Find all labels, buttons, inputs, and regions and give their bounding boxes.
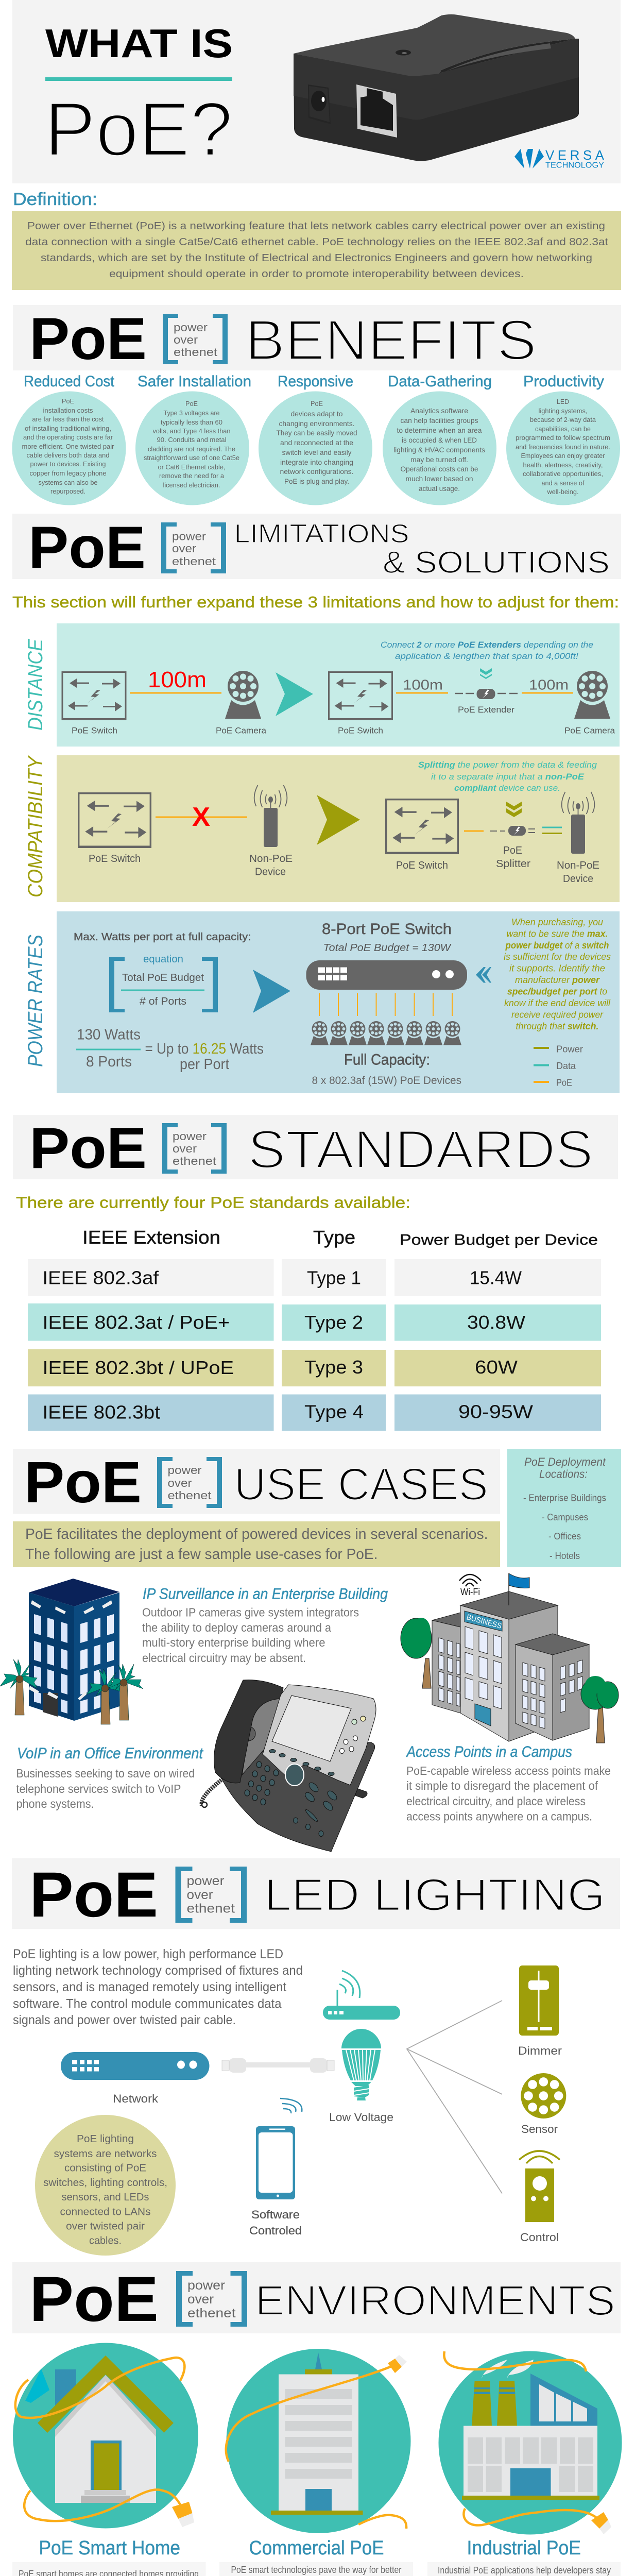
panel: standards heading: PoE bbox=[29, 1116, 147, 1180]
environment: industrial illustration bbox=[439, 2351, 622, 2535]
subheading: three limitations: This section will further expand these 3 limitations and how to adjust for them: bbox=[12, 593, 619, 611]
table row: type 2: 30.8W bbox=[467, 1312, 525, 1333]
equation block: Total PoE Budget bbox=[122, 972, 204, 984]
use case: IP surveillance: multi-story enterprise building where bbox=[142, 1636, 325, 1649]
table row: type 1: Type 1 bbox=[307, 1267, 361, 1288]
compatibility problem diagram: PoE Switch bbox=[89, 853, 141, 865]
benefit: productivity: lighting systems, bbox=[539, 407, 587, 415]
table row: type 4 bbox=[28, 1394, 601, 1431]
table row: type 2: Type 2 bbox=[304, 1312, 363, 1333]
8-port switch diagram: 8-Port PoE Switch bbox=[322, 921, 452, 938]
equation block bbox=[74, 931, 264, 1073]
benefit: responsive: and reconnected at the bbox=[280, 438, 353, 447]
panel: use cases heading: ethenet bbox=[168, 1489, 211, 1502]
panel: definition: equipment should operate in order to promote interoperability between devices. bbox=[109, 268, 524, 280]
panel: standards heading bbox=[13, 1115, 618, 1180]
control: remote: Control bbox=[520, 2231, 559, 2244]
compatibility solution diagram: Device bbox=[563, 873, 593, 885]
panel: use cases heading bbox=[13, 1449, 500, 1515]
power rates note: manufacturer power bbox=[515, 975, 600, 985]
benefit: data-gathering: Analytics software bbox=[410, 406, 468, 415]
distance problem diagram: PoE Camera bbox=[216, 725, 267, 736]
callout: PoE lighting systems: systems are networks bbox=[54, 2148, 157, 2160]
distance problem diagram: 100m bbox=[148, 667, 207, 692]
benefit: responsive: PoE is plug and play. bbox=[284, 477, 349, 485]
icon: palm trees bbox=[0, 1659, 143, 1724]
panel: benefits heading: PoE bbox=[29, 306, 147, 372]
panel: deployment locations bbox=[507, 1449, 621, 1567]
legend: Data bbox=[556, 1061, 576, 1071]
callout: PoE lighting systems: cables. bbox=[89, 2235, 122, 2246]
benefit: responsive: They can be easily moved bbox=[276, 429, 357, 437]
benefit: responsive: devices adapt to bbox=[290, 410, 343, 418]
benefit: data-gathering: may be turned off. bbox=[410, 455, 468, 464]
environment: commercial illustration bbox=[226, 2349, 411, 2533]
compatibility note: Splitting the power from the data & feeding bbox=[418, 760, 597, 770]
benefit: data-gathering: much lower based on bbox=[406, 474, 473, 483]
panel: power rates bbox=[57, 911, 620, 1093]
benefit: productivity: LED bbox=[557, 398, 569, 405]
compatibility note bbox=[418, 760, 597, 793]
panel: deployment locations: - Offices bbox=[548, 1531, 581, 1541]
panel: definition bbox=[12, 211, 621, 290]
benefit: productivity: Productivity bbox=[523, 373, 604, 390]
benefit: productivity: and frequencies found in nature. bbox=[516, 443, 610, 451]
heading: industrial: Industrial PoE bbox=[467, 2537, 581, 2559]
benefit: data-gathering: Operational costs can be bbox=[401, 465, 478, 473]
table header: IEEE Extension bbox=[82, 1227, 220, 1248]
benefit: safer installation: straightforward use of one Cat5e bbox=[144, 454, 239, 462]
benefit: reduced cost bbox=[12, 373, 126, 505]
icon: wireless router bbox=[323, 1971, 400, 2020]
panel: deployment locations: - Enterprise Buildings bbox=[523, 1493, 606, 1503]
benefit: productivity bbox=[506, 373, 620, 505]
benefit: responsive: PoE bbox=[311, 399, 323, 408]
callout: PoE lighting systems: consisting of PoE bbox=[64, 2163, 146, 2174]
use case: VoIP bbox=[16, 1745, 204, 1810]
panel: environments heading: power bbox=[187, 2278, 225, 2293]
benefit: productivity: Employees can enjoy greater bbox=[521, 452, 605, 460]
panel: standards heading: over bbox=[173, 1142, 197, 1155]
icon: smartphone software control: Software bbox=[251, 2208, 300, 2221]
heading: commercial: Commercial PoE bbox=[249, 2537, 384, 2559]
panel: benefits heading: ethenet bbox=[174, 346, 217, 359]
panel: distance bbox=[57, 623, 620, 747]
benefit: reduced cost: power to devices. Existing bbox=[30, 460, 106, 468]
benefit: responsive: changing environments. bbox=[279, 419, 354, 428]
panel: use cases heading: over bbox=[168, 1477, 192, 1489]
benefit: safer installation: typically less than 60 bbox=[161, 418, 222, 426]
callout: PoE lighting systems bbox=[35, 2115, 176, 2256]
icon: wifi signal bbox=[459, 1574, 481, 1597]
table row: type 1 bbox=[28, 1259, 601, 1296]
panel: deployment locations: Locations: bbox=[539, 1467, 588, 1481]
benefit: productivity: because of 2-way data bbox=[530, 416, 596, 423]
icon: PoE lighting bulb bbox=[329, 2029, 393, 2124]
panel: commercial text: PoE smart technologies pave the way for better bbox=[231, 2565, 402, 2575]
panel: industrial text: Industrial PoE applications help developers stay bbox=[438, 2565, 611, 2575]
callout: PoE lighting systems: sensors, and LEDs bbox=[62, 2192, 149, 2203]
table row: type 3 bbox=[28, 1349, 601, 1386]
panel: use cases intro: PoE facilitates the deployment of powered devices in several scenarios. bbox=[25, 1526, 488, 1543]
use case: VoIP: VoIP in an Office Environment bbox=[17, 1745, 204, 1762]
equation block: equation bbox=[143, 954, 183, 965]
panel: use cases heading: power bbox=[168, 1464, 202, 1477]
benefit: safer installation: remove the need for a bbox=[159, 472, 225, 480]
benefit: safer installation: PoE bbox=[185, 400, 198, 408]
use case: access points: PoE-capable wireless access points make bbox=[406, 1764, 611, 1777]
heading: definition: Definition: bbox=[13, 190, 97, 209]
distance solution diagram: PoE Extender bbox=[458, 705, 514, 715]
panel: deployment locations: - Campuses bbox=[542, 1512, 588, 1522]
text: LED lighting description bbox=[13, 1947, 303, 2027]
use case: access points: electrical circuitry, and place wireless bbox=[406, 1794, 586, 1808]
compatibility note: it to a separate input that a non-PoE bbox=[431, 772, 585, 782]
benefit: data-gathering: Data-Gathering bbox=[388, 373, 492, 390]
text: LED lighting description: software. The control module communicates data bbox=[13, 1997, 282, 2011]
icon: campus building: BUSINESS bbox=[466, 1613, 503, 1631]
use case: VoIP: Businesses seeking to save on wired bbox=[16, 1767, 195, 1780]
panel: benefits heading: over bbox=[174, 333, 198, 346]
label: distance: DISTANCE bbox=[24, 638, 47, 731]
title: PoE?: PoE? bbox=[44, 86, 233, 172]
equation block: per Port bbox=[180, 1056, 229, 1073]
benefit: productivity: health, alertness, creativity, bbox=[523, 461, 603, 469]
control: sensor: Sensor bbox=[521, 2123, 558, 2136]
icon: enterprise building bbox=[0, 1579, 143, 1724]
power rates note: through that switch. bbox=[516, 1021, 598, 1031]
logo: versa technology: TECHNOLOGY bbox=[545, 161, 604, 170]
panel: definition: Power over Ethernet (PoE) is a networking feature that lets network cables carry electrical power over an existing bbox=[27, 221, 605, 232]
power rates note bbox=[504, 917, 611, 1031]
connector lines bbox=[407, 2001, 502, 2194]
panel: benefits heading bbox=[13, 305, 621, 372]
distance solution diagram: 100m bbox=[529, 677, 569, 692]
panel: limitations heading: PoE bbox=[28, 515, 146, 581]
icon: PoE lighting bulb: Low Voltage bbox=[329, 2111, 393, 2124]
callout: PoE lighting systems: PoE lighting bbox=[77, 2133, 134, 2145]
distance note bbox=[381, 640, 593, 661]
text: LED lighting description: lighting network technology comprised of fixtures and bbox=[13, 1963, 303, 1978]
panel: use cases heading: PoE bbox=[24, 1450, 142, 1515]
table row: type 2 bbox=[28, 1303, 601, 1341]
use case: VoIP: telephone services switch to VoIP bbox=[16, 1782, 181, 1795]
icon: wifi signal: Wi-Fi bbox=[460, 1587, 480, 1597]
logo: versa technology: VERSA bbox=[545, 147, 605, 163]
distance solution diagram bbox=[328, 668, 615, 736]
compatibility problem diagram: Device bbox=[255, 867, 286, 878]
compatibility solution diagram: PoE bbox=[503, 845, 522, 856]
panel: benefits heading: BENEFITS bbox=[245, 309, 537, 372]
equation block: # of Ports bbox=[140, 996, 186, 1007]
panel: use cases intro bbox=[13, 1521, 500, 1567]
8-port switch diagram: Full Capacity: bbox=[344, 1051, 430, 1069]
benefit: safer installation: cladding are not required. The bbox=[148, 445, 235, 453]
icon: trees bbox=[401, 1618, 619, 1743]
table row: type 2: IEEE 802.3at / PoE+ bbox=[42, 1312, 230, 1333]
panel: smart home text bbox=[12, 2562, 206, 2576]
icon: desk phone bbox=[202, 1680, 376, 1852]
control: sensor bbox=[521, 2073, 566, 2136]
label: power rates: POWER RATES bbox=[24, 935, 47, 1067]
panel: LED lighting heading: over bbox=[186, 1888, 213, 1902]
benefit: productivity: programmed to follow spectrum bbox=[516, 434, 610, 442]
equation block: 8 Ports bbox=[86, 1054, 132, 1070]
use case: IP surveillance: IP Surveillance in an Enterprise Building bbox=[143, 1586, 388, 1602]
table header: Power Budget per Device bbox=[400, 1232, 598, 1248]
benefit: reduced cost: and the operating costs are far bbox=[23, 433, 113, 441]
benefit: safer installation: Type 3 voltages are bbox=[164, 409, 219, 417]
benefit: reduced cost: are far less than the cost bbox=[32, 415, 104, 423]
power rates note: want to be sure the max. bbox=[507, 928, 608, 939]
compatibility note: compliant device can use. bbox=[454, 783, 560, 793]
panel: commercial text bbox=[219, 2562, 413, 2576]
heading: smart home: PoE Smart Home bbox=[39, 2537, 180, 2559]
equation block: Max. Watts per port at full capacity: bbox=[74, 931, 251, 943]
use case: IP surveillance: Outdoor IP cameras give system integrators bbox=[142, 1605, 359, 1619]
panel: limitations heading: over bbox=[172, 542, 196, 555]
8-port switch diagram: Total PoE Budget = 130W bbox=[323, 942, 452, 954]
benefit: reduced cost: Reduced Cost bbox=[24, 373, 115, 390]
panel: limitations heading: ethenet bbox=[172, 555, 216, 568]
distance problem diagram: PoE Switch bbox=[72, 725, 117, 736]
distance problem diagram bbox=[62, 667, 267, 736]
legend: PoE bbox=[556, 1078, 572, 1088]
network switch bbox=[61, 2052, 209, 2105]
benefit: reduced cost: installation costs bbox=[43, 406, 93, 414]
table header: Type bbox=[313, 1227, 355, 1248]
icon: campus building bbox=[401, 1573, 619, 1743]
ethernet cable bbox=[222, 2058, 334, 2073]
panel: LED lighting heading: PoE bbox=[29, 1859, 158, 1930]
table row: type 3: IEEE 802.3bt / UPoE bbox=[42, 1357, 234, 1378]
text: LED lighting description: signals and power over twisted pair cable. bbox=[13, 2013, 236, 2027]
benefit: data-gathering: is occupied & when LED bbox=[402, 436, 477, 444]
table row: type 3: Type 3 bbox=[304, 1357, 363, 1378]
distance note: Connect 2 or more PoE Extenders depending on the bbox=[381, 640, 593, 650]
panel: hero bbox=[12, 0, 621, 183]
use case: access points: it simple to disregard the placement of bbox=[406, 1779, 598, 1792]
panel: environments heading: over bbox=[187, 2292, 214, 2307]
panel: benefits heading: power bbox=[174, 321, 208, 334]
power rates note: receive required power bbox=[511, 1010, 604, 1020]
panel: standards heading: ethenet bbox=[173, 1155, 216, 1167]
panel: limitations heading: & SOLUTIONS bbox=[383, 545, 610, 580]
use case: access points bbox=[406, 1743, 611, 1823]
distance solution diagram: PoE Camera bbox=[564, 725, 615, 736]
panel: LED lighting heading bbox=[12, 1858, 620, 1930]
subheading: four standards: There are currently four PoE standards available: bbox=[16, 1193, 410, 1212]
power rates note: know if the end device will bbox=[504, 998, 611, 1008]
panel: environments heading bbox=[12, 2262, 621, 2335]
power rates note: power budget of a switch bbox=[505, 940, 609, 951]
table row: type 1: 15.4W bbox=[470, 1267, 522, 1288]
icon: PoE injector device bbox=[294, 14, 579, 161]
label: compatibility: COMPATIBILITY bbox=[24, 755, 47, 897]
distance note: application & lengthen that span to 4,000ft! bbox=[395, 651, 578, 661]
panel: LED lighting heading: power bbox=[186, 1874, 225, 1888]
compatibility problem diagram bbox=[78, 785, 293, 878]
use case: IP surveillance: the ability to deploy cameras around a bbox=[142, 1621, 331, 1634]
panel: environments heading: ENVIRONMENTS bbox=[255, 2276, 615, 2325]
benefit: safer installation bbox=[135, 373, 251, 505]
panel: use cases intro: The following are just a few sample use-cases for PoE. bbox=[25, 1546, 378, 1563]
panel: definition: data connection with a single Cat5e/Cat6 ethernet cable. PoE technology relies on the IEEE 802.3af and 802.3at bbox=[25, 236, 608, 248]
panel: LED lighting heading: LED LIGHTING bbox=[264, 1869, 606, 1920]
benefit: reduced cost: copper from legacy phone bbox=[30, 469, 106, 477]
use case: IP surveillance bbox=[142, 1586, 388, 1665]
benefit: responsive bbox=[259, 373, 372, 505]
power rates note: spec/budget per port to bbox=[507, 986, 607, 996]
benefit: reduced cost: of installing traditional wiring, bbox=[25, 425, 111, 432]
benefit: reduced cost: more efficient. One twisted pair bbox=[22, 443, 114, 450]
arrow bbox=[276, 672, 313, 716]
benefit: safer installation: 90. Conduits and metal bbox=[157, 436, 227, 444]
benefit: reduced cost: systems can also be bbox=[38, 479, 98, 486]
benefit: reduced cost: repurposed. bbox=[50, 487, 85, 495]
arrow bbox=[253, 970, 290, 1013]
equation block: 130 Watts bbox=[77, 1026, 141, 1043]
benefit: responsive: integrate into changing bbox=[280, 458, 353, 466]
table row: type 1: IEEE 802.3af bbox=[42, 1267, 159, 1288]
benefit: reduced cost: cable delivers both data and bbox=[27, 451, 109, 459]
compatibility solution diagram: Splitter bbox=[496, 858, 530, 870]
table: PoE standards bbox=[28, 1227, 601, 1431]
use case: IP surveillance: electrical circuitry may be absent. bbox=[142, 1651, 306, 1665]
benefit: safer installation: Safer Installation bbox=[138, 373, 251, 390]
benefit: data-gathering: to determine when an area bbox=[397, 426, 482, 434]
network switch: Network bbox=[113, 2092, 159, 2105]
panel: deployment locations: PoE Deployment bbox=[524, 1455, 606, 1468]
benefit: productivity: and a sense of bbox=[542, 479, 585, 487]
legend bbox=[534, 1044, 583, 1088]
panel: deployment locations: - Hotels bbox=[550, 1551, 580, 1561]
arrow bbox=[317, 795, 360, 845]
benefit: reduced cost: PoE bbox=[62, 397, 74, 405]
icon: smartphone software control bbox=[249, 2098, 302, 2237]
panel: definition: standards, which are set by the Institute of Electrical and Electronics Engineers and govern how networking bbox=[41, 252, 592, 264]
control: remote bbox=[519, 2151, 560, 2244]
use case: access points: access points anywhere on a campus. bbox=[406, 1809, 592, 1823]
compatibility solution diagram: Non-PoE bbox=[557, 860, 599, 871]
compatibility solution diagram bbox=[385, 792, 599, 885]
panel: standards heading: STANDARDS bbox=[248, 1120, 593, 1180]
benefit: productivity: collaborative opportunities, bbox=[523, 470, 603, 478]
icon: smartphone software control: Controled bbox=[249, 2224, 302, 2237]
callout: PoE lighting systems: switches, lighting controls, bbox=[43, 2177, 167, 2189]
benefit: safer installation: licensed electrician. bbox=[163, 481, 220, 489]
benefit: responsive: switch level and easily bbox=[282, 448, 351, 456]
benefit: data-gathering bbox=[383, 373, 496, 505]
control: dimmer: Dimmer bbox=[518, 2044, 562, 2057]
8-port switch diagram bbox=[306, 921, 491, 1087]
panel: compatibility bbox=[57, 755, 620, 902]
compatibility problem diagram: Non-PoE bbox=[249, 853, 293, 865]
table row: type 4: IEEE 802.3bt bbox=[42, 1401, 160, 1423]
panel: LED lighting heading: ethenet bbox=[186, 1901, 235, 1916]
panel: limitations heading bbox=[12, 514, 621, 581]
use case: access points: Access Points in a Campus bbox=[406, 1743, 572, 1760]
compatibility problem diagram: X bbox=[192, 802, 210, 832]
table header bbox=[82, 1227, 598, 1248]
equation block: = Up to 16.25 Watts bbox=[145, 1041, 264, 1057]
title: what is: WHAT IS bbox=[45, 21, 233, 66]
distance solution diagram: PoE Switch bbox=[338, 725, 383, 736]
panel: limitations heading: power bbox=[172, 530, 206, 543]
benefit: data-gathering: can help facilities groups bbox=[401, 416, 478, 425]
legend: Power bbox=[556, 1044, 583, 1054]
power rates note: When purchasing, you bbox=[511, 917, 603, 927]
callout: PoE lighting systems: over twisted pair bbox=[66, 2221, 145, 2232]
benefit: responsive: Responsive bbox=[278, 373, 353, 390]
environment: smart home illustration bbox=[13, 2343, 198, 2529]
table row: type 3: 60W bbox=[475, 1357, 518, 1378]
8-port switch diagram: 8 x 802.3af (15W) PoE Devices bbox=[312, 1075, 461, 1087]
text: LED lighting description: PoE lighting is a low power, high performance LED bbox=[13, 1947, 283, 1961]
benefit: productivity: well-being. bbox=[547, 488, 579, 496]
benefit: safer installation: or Cat6 Ethernet cable, bbox=[158, 463, 226, 471]
power rates note: is sufficient for the devices bbox=[504, 952, 611, 962]
benefit: safer installation: volts, and Type 4 less than bbox=[152, 427, 231, 435]
benefit: responsive: network configurations. bbox=[280, 467, 353, 476]
table row: type 4: Type 4 bbox=[304, 1401, 364, 1422]
panel: environments heading: PoE bbox=[29, 2264, 159, 2335]
text: LED lighting description: sensors, and is managed remotely using intelligent bbox=[13, 1980, 286, 1994]
panel: standards heading: power bbox=[173, 1130, 207, 1143]
panel: limitations heading: LIMITATIONS bbox=[234, 519, 409, 548]
power rates note: it supports. Identify the bbox=[509, 963, 605, 974]
table row: type 4: 90-95W bbox=[458, 1401, 533, 1422]
control: dimmer bbox=[518, 1965, 562, 2057]
benefit: data-gathering: lighting & HVAC components bbox=[393, 446, 485, 454]
title underline bbox=[45, 77, 232, 81]
panel: industrial text bbox=[427, 2562, 621, 2576]
callout: PoE lighting systems: connected to LANs bbox=[60, 2206, 150, 2217]
benefit: productivity: capabilities, can be bbox=[535, 425, 591, 433]
logo: versa technology bbox=[514, 147, 605, 170]
panel: environments heading: ethenet bbox=[187, 2306, 236, 2320]
use case: VoIP: phone systems. bbox=[16, 1797, 94, 1810]
panel: use cases heading: USE CASES bbox=[234, 1459, 488, 1510]
distance solution diagram: 100m bbox=[403, 677, 443, 692]
benefit: data-gathering: actual usage. bbox=[419, 484, 460, 493]
compatibility solution diagram: PoE Switch bbox=[396, 860, 448, 871]
